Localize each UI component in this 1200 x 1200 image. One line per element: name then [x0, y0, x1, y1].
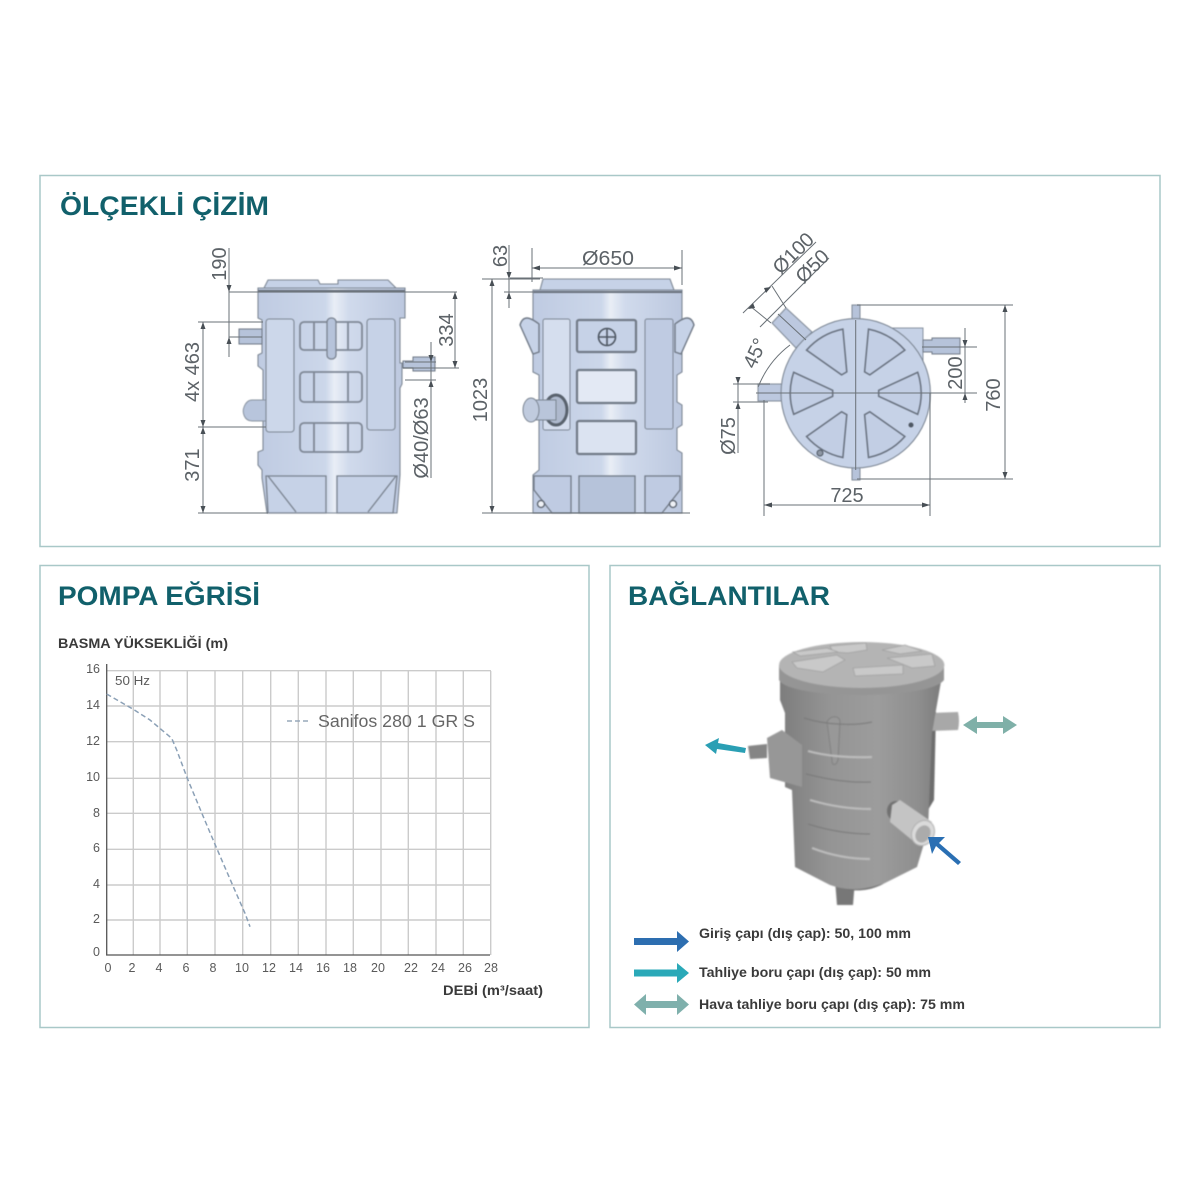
left raised panel [266, 319, 294, 432]
x axis labels: 10 [235, 961, 249, 975]
left lug [520, 318, 539, 354]
valve marker [817, 450, 823, 456]
drawing: front view [520, 279, 694, 513]
side block [767, 730, 802, 787]
panel: connections [610, 566, 1160, 1028]
y axis labels [86, 662, 100, 959]
x axis labels: 18 [343, 961, 357, 975]
pump 3D illustration [748, 642, 959, 905]
y axis labels: 8 [93, 806, 100, 820]
dimensions: side view: 190 [209, 247, 231, 281]
y axis labels: 14 [86, 698, 100, 712]
right raised panel [645, 319, 673, 429]
recess 3 [577, 421, 636, 454]
y axis labels: 10 [86, 770, 100, 784]
x axis labels: 12 [262, 961, 276, 975]
right discharge pipe [403, 357, 435, 371]
dimensions: front view: 63 [490, 245, 512, 267]
45 degree inlet pipe [772, 308, 812, 348]
top lug [852, 305, 860, 319]
panel: scale drawing [40, 176, 1160, 546]
legend: inlet diameter [634, 925, 911, 952]
base bolts [538, 500, 676, 508]
inlet stub [243, 400, 266, 421]
inlet pipe [523, 395, 567, 425]
legend arrow: discharge [634, 963, 689, 983]
x axis labels [105, 961, 498, 975]
x axis labels: 24 [431, 961, 445, 975]
vent side ribbing [925, 712, 936, 815]
right pipe [923, 338, 960, 354]
x axis labels: 26 [458, 961, 472, 975]
lid skirt [779, 665, 944, 695]
legend: discharge diameter: Tahliye boru çapı (dış çap): 50 mm [699, 964, 931, 980]
y axis title: BASMA YÜKSEKLİĞİ (m) [58, 634, 228, 651]
dimensions: top view: 760 [983, 378, 1005, 412]
dimensions: side view: 4x 463 [182, 342, 204, 402]
x axis labels: 0 [105, 961, 112, 975]
dimensions: top view: Ø50 [792, 246, 834, 288]
lid [264, 280, 396, 288]
dimensions: side view: 371 [182, 448, 204, 482]
curve [107, 694, 250, 927]
left raised panel [543, 319, 570, 430]
drawing: top view [758, 305, 960, 480]
dimensions: top view: Ø100 [769, 229, 819, 279]
legend: air vent diameter: Hava tahliye boru çapı (dış çap): 75 mm [699, 996, 965, 1012]
x axis labels: 14 [289, 961, 303, 975]
dimensions: front view [470, 245, 690, 513]
dimensions: front view: 1023 [470, 378, 492, 422]
left drain pipe [239, 329, 262, 344]
y axis labels: 0 [93, 945, 100, 959]
legend arrow: air vent [634, 994, 689, 1015]
right lug [675, 318, 694, 354]
dimensions: top view: 45° [739, 335, 772, 372]
x axis labels: 22 [404, 961, 418, 975]
drawing: side view [239, 280, 435, 513]
drain marker [908, 422, 914, 428]
base panels [534, 476, 680, 513]
recess row 1 [300, 322, 362, 350]
discharge pipe stub [748, 744, 767, 759]
dimensions: top view: 725 [830, 485, 864, 507]
recess row 3 [300, 423, 362, 452]
panel: pump curve [40, 566, 589, 1028]
left vent pipe [758, 384, 783, 401]
frequency label: 50 Hz [115, 674, 150, 688]
bottom dome [818, 868, 900, 890]
dimensions: top view: 200 [945, 356, 967, 390]
lid segments [790, 326, 921, 460]
heading: connections: BAĞLANTILAR [628, 580, 830, 611]
y axis labels: 6 [93, 841, 100, 855]
y axis labels: 2 [93, 912, 100, 926]
heading: scale drawing: ÖLÇEKLİ ÇİZİM [60, 191, 269, 221]
x axis title: DEBİ (m³/saat) [443, 982, 543, 998]
arrow: air vent [963, 716, 1017, 734]
lid [540, 279, 674, 290]
legend: inlet diameter: Giriş çapı (dış çap): 50, 100 mm [699, 925, 911, 941]
handle [327, 318, 336, 359]
foot [835, 880, 855, 905]
lid top [779, 642, 944, 688]
recess 1 [577, 320, 636, 352]
right outlet block [893, 328, 923, 362]
base panels [266, 476, 397, 513]
x axis labels: 28 [484, 961, 498, 975]
dimensions: top view [718, 229, 1013, 516]
axes [107, 664, 490, 955]
x axis labels: 4 [156, 961, 163, 975]
dimensions: side view [182, 247, 459, 513]
x axis labels: 16 [316, 961, 330, 975]
tank body [258, 288, 405, 513]
tank circle [781, 319, 930, 468]
x axis labels: 8 [210, 961, 217, 975]
legend arrow: inlet [634, 931, 689, 952]
dimensions: front view: Ø650 [582, 248, 634, 270]
y axis labels: 12 [86, 734, 100, 748]
x axis labels: 6 [183, 961, 190, 975]
right raised panel [367, 319, 395, 430]
inlet pipe [887, 800, 939, 850]
tank body [533, 290, 682, 513]
legend: discharge diameter [634, 963, 931, 983]
body ribs [808, 751, 872, 859]
legend: air vent diameter [634, 994, 965, 1015]
dimensions: top view: Ø75 [718, 417, 740, 455]
heading: pump curve: POMPA EĞRİSİ [58, 580, 260, 611]
tank body [780, 670, 943, 889]
x axis labels: 20 [371, 961, 385, 975]
recess row 2 [300, 372, 362, 402]
pump curve chart [86, 662, 498, 975]
lid pads [792, 643, 935, 676]
dimensions: side view: Ø40/Ø63 [411, 397, 433, 479]
bottom lug [852, 467, 860, 480]
y axis labels: 16 [86, 662, 100, 676]
x axis labels: 2 [129, 961, 136, 975]
y axis labels: 4 [93, 877, 100, 891]
curve legend: Sanifos 280 1 GR S [318, 711, 475, 731]
vent pipe stub [930, 712, 959, 731]
vent symbol [598, 328, 616, 346]
dimensions: side view: 334 [436, 313, 458, 347]
hanging handle [827, 717, 840, 764]
recess 2 [577, 370, 636, 403]
arrow: inlet [928, 837, 961, 865]
arrow: discharge [705, 738, 746, 754]
